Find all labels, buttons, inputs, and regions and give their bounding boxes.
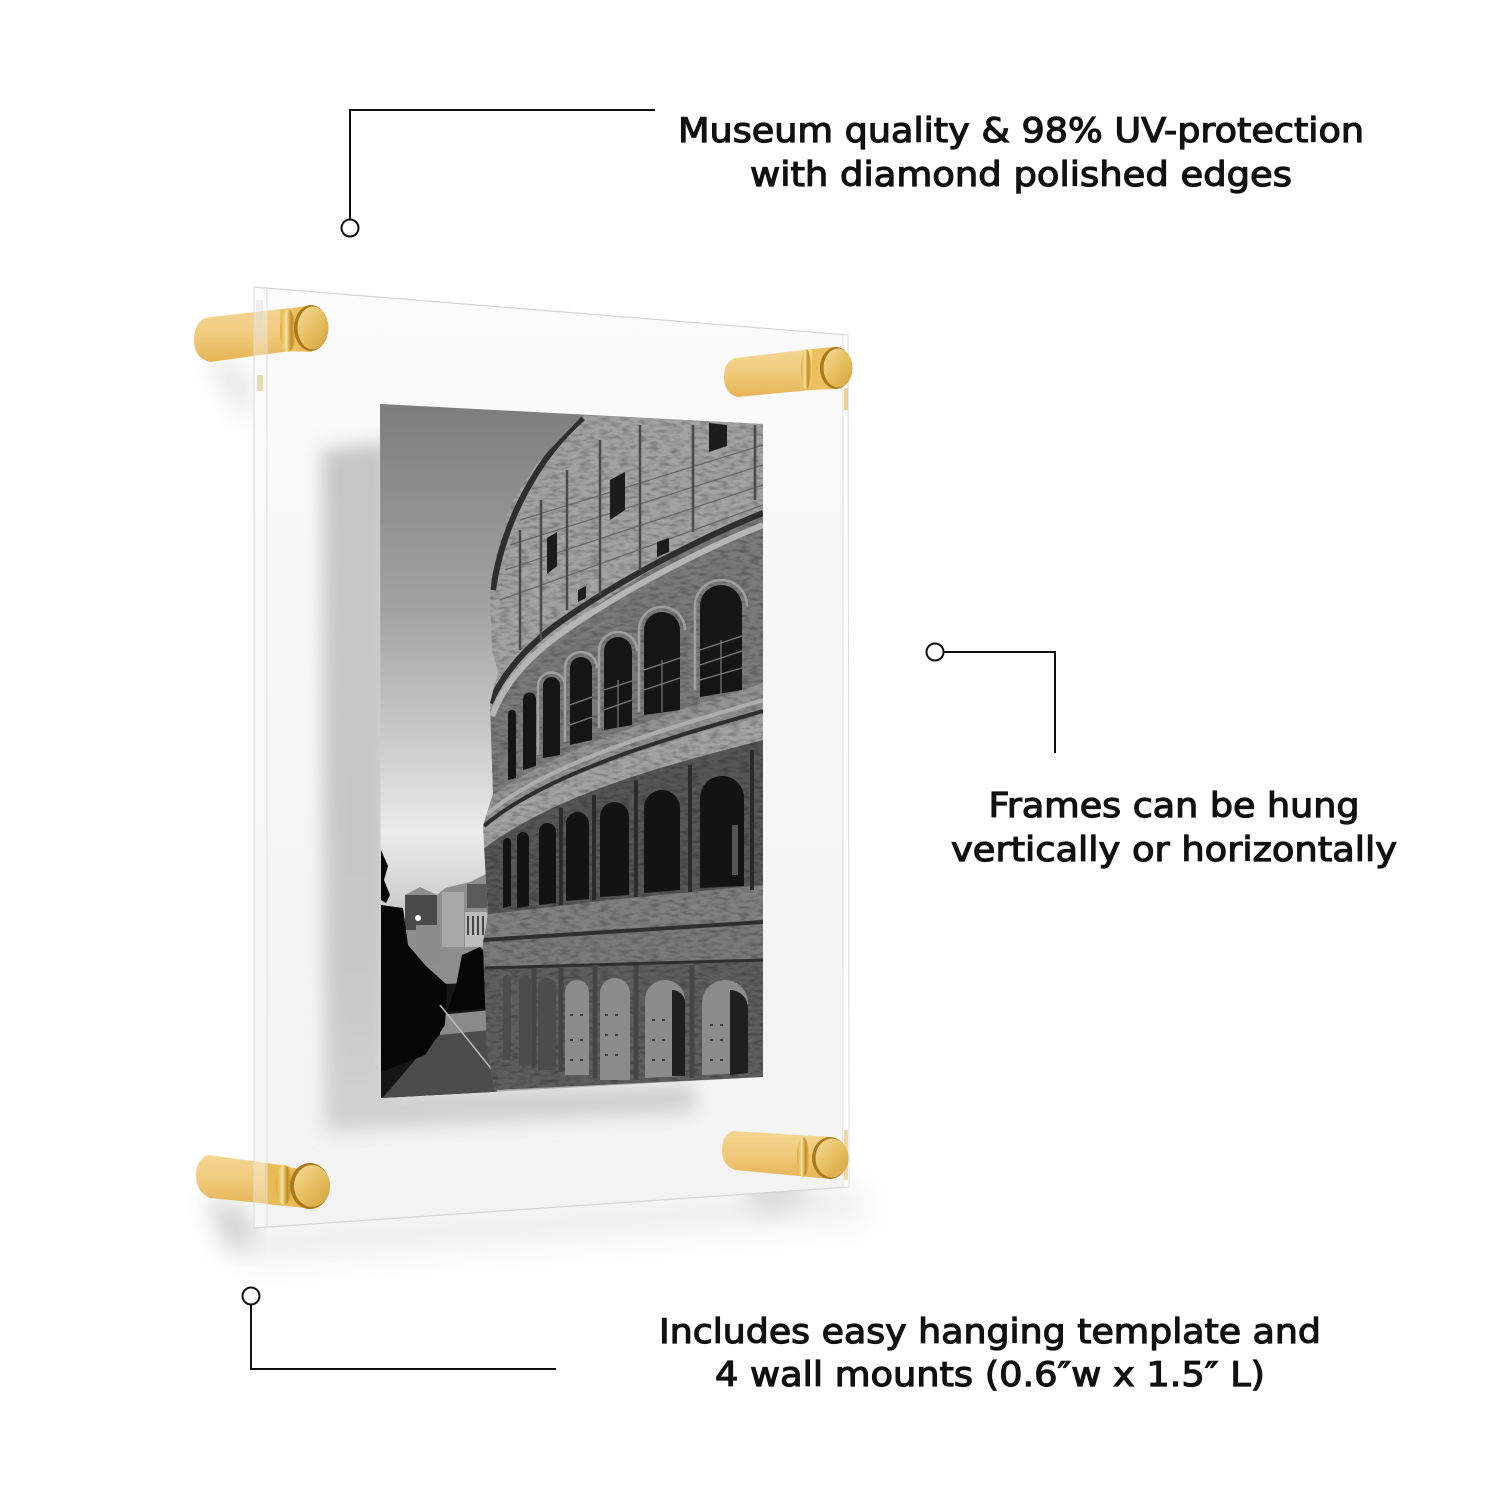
street <box>381 1030 497 1100</box>
photo shadow on wall <box>322 442 695 1132</box>
light wire <box>440 1005 510 1092</box>
stone texture <box>480 410 770 1100</box>
ground arches narrow <box>503 975 556 1070</box>
lower arches <box>503 776 744 908</box>
upper arch surrounds <box>538 580 747 755</box>
upper wall windows <box>547 423 727 602</box>
attic of lower tier <box>482 885 763 940</box>
lower arcade tier <box>482 740 763 945</box>
upper wall pilasters <box>520 425 755 650</box>
callout line: top <box>342 110 655 236</box>
ground arches <box>565 978 748 1080</box>
callout text: hanging orientation: Frames can be hung <box>988 786 1360 825</box>
callout text: hanging orientation <box>951 786 1397 869</box>
upper arches <box>508 585 742 780</box>
lower piers <box>561 750 752 905</box>
lower arch interior light <box>732 825 738 875</box>
upper arch railings <box>570 636 742 728</box>
post: bottom-left <box>196 1155 330 1209</box>
panel edge highlights <box>254 287 849 1228</box>
callout text: museum quality <box>678 111 1364 194</box>
cornices <box>483 418 763 968</box>
wall shadows <box>205 350 872 1258</box>
callout line: right <box>926 644 1055 753</box>
trees <box>381 850 488 1072</box>
callout text: museum quality: with diamond polished edges <box>750 155 1292 194</box>
callout text: hanging template: 4 wall mounts (0.6″w x 1.5″ L) <box>715 1355 1265 1394</box>
post: bottom-right <box>722 1131 848 1179</box>
distant buildings <box>405 872 490 985</box>
post: top-left <box>194 305 328 362</box>
ground pitting <box>570 1015 730 1060</box>
photo: Colosseum <box>380 404 770 1104</box>
ground arch shadows <box>672 990 748 1076</box>
Colosseum building <box>480 410 770 1100</box>
callout line: bottom <box>242 1288 556 1369</box>
band between tiers <box>482 683 763 826</box>
masonry lines <box>500 445 763 600</box>
acrylic panel <box>254 287 849 1228</box>
ground piers <box>534 965 692 1080</box>
callout text: hanging template: Includes easy hanging template and <box>659 1312 1321 1351</box>
sky <box>380 404 764 1104</box>
callout text: hanging orientation: vertically or horizontally <box>951 830 1397 869</box>
upper arcade tier <box>486 515 763 810</box>
callout text: hanging template <box>659 1312 1321 1394</box>
dark ground behind trees <box>381 983 495 1100</box>
rear wall <box>440 1010 486 1035</box>
right acrylic edge strip <box>843 335 849 1187</box>
ground tier <box>483 941 763 1090</box>
callout text: museum quality: Museum quality & 98% UV-protection <box>678 111 1364 150</box>
post: top-right <box>724 347 852 397</box>
left acrylic edge strip <box>254 287 267 1228</box>
